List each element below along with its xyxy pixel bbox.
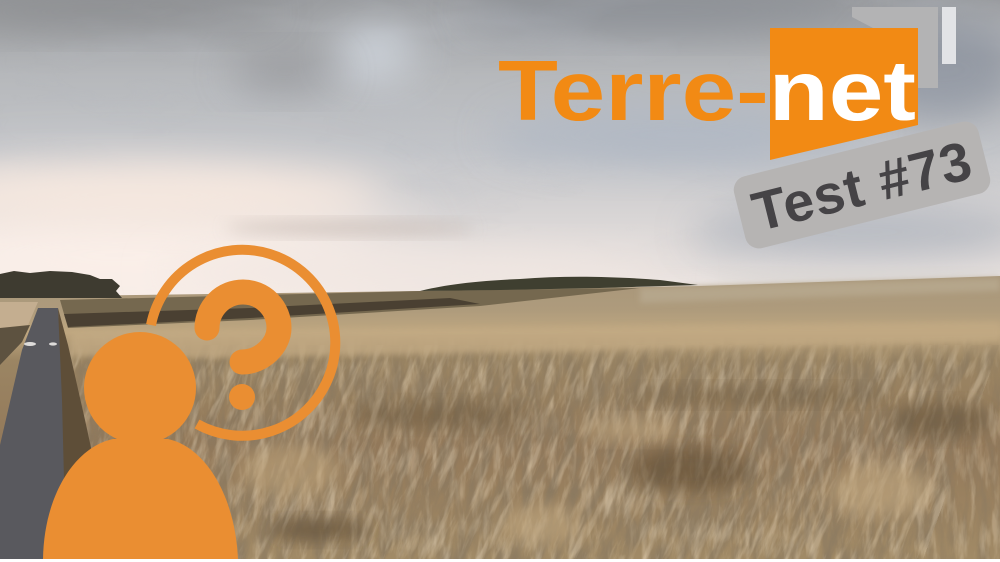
question mark hook [207,292,279,362]
road [0,308,66,559]
person head [84,332,196,444]
distant hedge [420,277,698,291]
bottom white strip [0,559,1000,562]
badge: Test #73 [731,119,993,251]
thought ring [151,250,335,436]
logo orange square [770,28,918,160]
background photo: sky [0,0,1000,315]
logo wordmark: Terre- net [498,44,916,139]
background photo: field [0,271,1000,559]
treeline left [0,271,122,298]
question mark dot [229,384,255,410]
logo light bar [942,7,956,64]
person body [43,439,238,559]
logo grey corner [852,7,938,88]
left verge [0,302,38,328]
badge text: Test #73 [746,129,978,243]
far fields [60,288,640,328]
logo: Terre-net [498,7,956,160]
icon: person with question mark [43,250,335,559]
